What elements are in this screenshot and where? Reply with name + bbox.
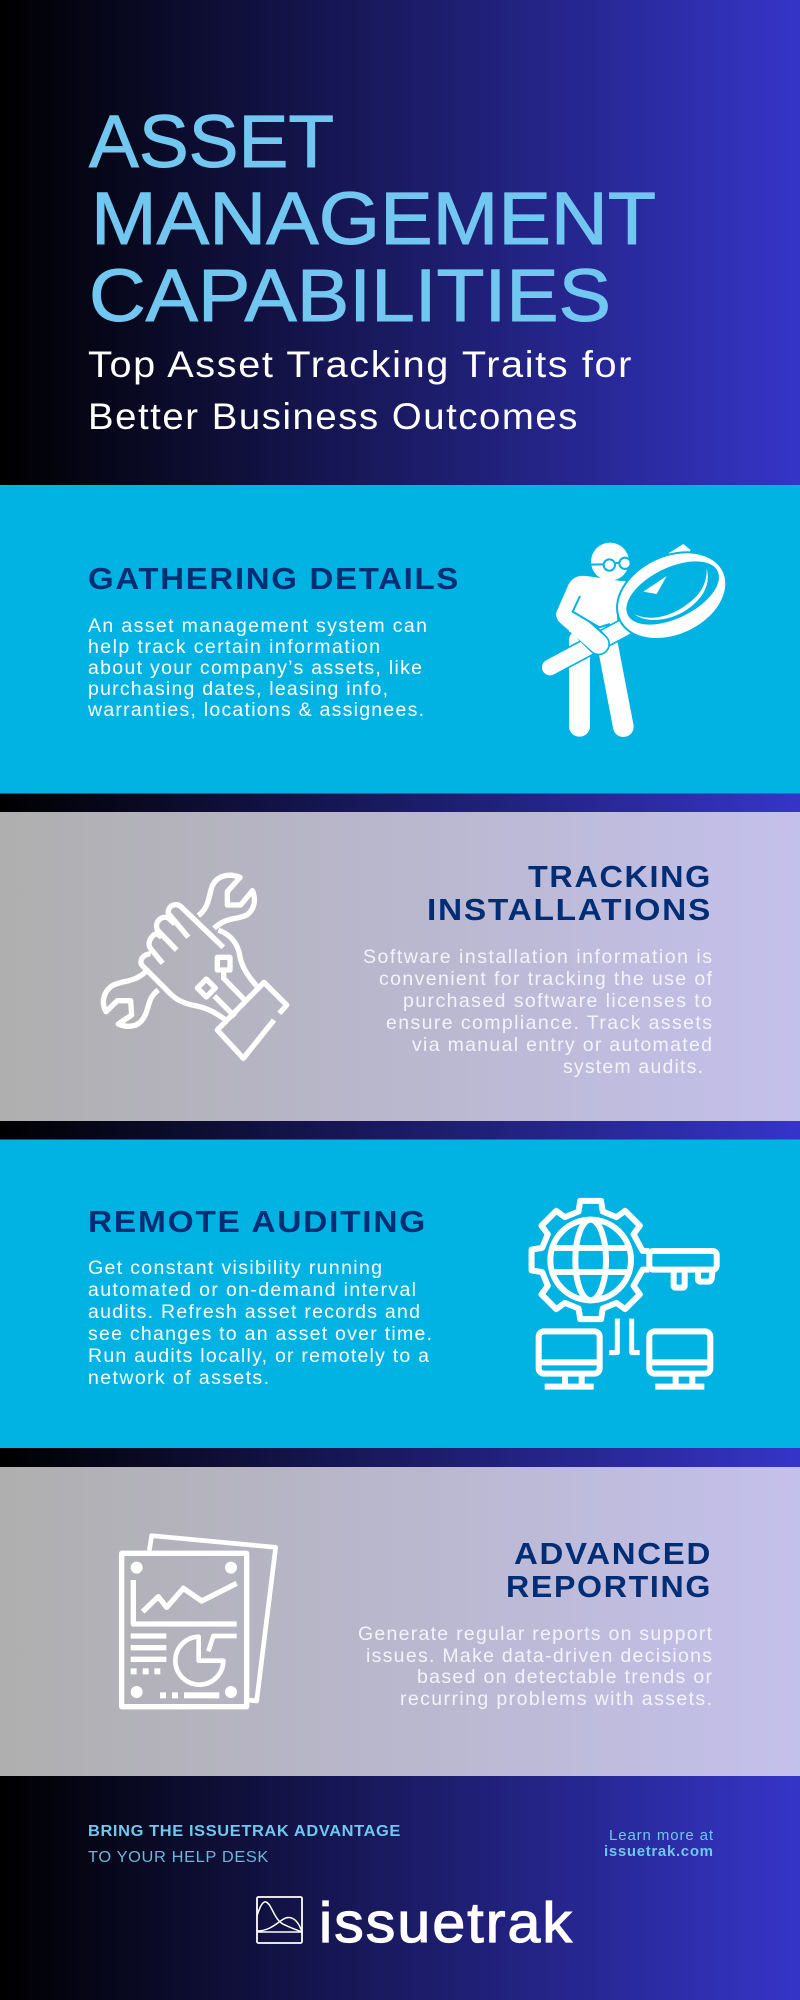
body text: advanced reporting	[358, 1623, 713, 1710]
icon: person with magnifying glass	[550, 535, 740, 737]
panel: tracking installations	[0, 812, 800, 1121]
body text: advanced reporting: recurring problems with assets.	[400, 1688, 712, 1710]
icon: report pages with charts	[122, 1536, 276, 1707]
subtitle	[88, 344, 633, 437]
body text: tracking installations: convenient for tracking the use of	[379, 968, 713, 990]
panel: gathering details	[0, 485, 800, 794]
learn more link: Learn more at	[609, 1827, 714, 1844]
body text: tracking installations: purchased software licenses to	[403, 990, 712, 1012]
body text: gathering details: purchasing dates, leasing info,	[88, 678, 388, 700]
body text: remote auditing: see changes to an asset over time.	[88, 1323, 432, 1345]
logo wordmark: issuetrak	[319, 1891, 574, 1955]
body text: gathering details: warranties, locations & assignees.	[87, 699, 424, 721]
heading: advanced reporting: ADVANCED	[514, 1536, 712, 1571]
body text: remote auditing: audits. Refresh asset records and	[88, 1301, 420, 1323]
body text: tracking installations: via manual entry or automated	[412, 1034, 712, 1056]
body text: tracking installations	[363, 946, 713, 1078]
body text: advanced reporting: issues. Make data-driven decisions	[366, 1645, 712, 1667]
title: ASSET	[89, 100, 334, 183]
heading: tracking installations: TRACKING	[528, 859, 712, 894]
footer	[88, 1823, 714, 1955]
body text: gathering details: help track certain information	[88, 636, 380, 658]
learn more link	[604, 1827, 714, 1860]
body text: gathering details: An asset management system can	[88, 615, 427, 637]
call to action	[88, 1823, 401, 1866]
subtitle: Top Asset Tracking Traits for	[88, 344, 633, 385]
call to action: TO YOUR HELP DESK	[88, 1849, 269, 1866]
learn more link: issuetrak.com	[604, 1843, 713, 1860]
icon: gear globe key and monitors	[532, 1201, 717, 1387]
icon: hand gripping wrench with circuit	[103, 875, 287, 1058]
body text: tracking installations: Software installation information is	[363, 946, 712, 968]
heading: tracking installations: INSTALLATIONS	[427, 892, 712, 927]
body text: tracking installations: system audits.	[563, 1056, 703, 1078]
heading: advanced reporting: REPORTING	[506, 1569, 712, 1604]
body text: advanced reporting: Generate regular reports on support	[358, 1623, 713, 1645]
logo mark	[257, 1897, 302, 1943]
heading: advanced reporting	[506, 1536, 712, 1604]
body text: remote auditing: network of assets.	[88, 1367, 269, 1389]
body text: gathering details	[87, 615, 427, 721]
body text: remote auditing: automated or on-demand interval	[88, 1279, 416, 1301]
body text: gathering details: about your company’s assets, like	[88, 657, 422, 679]
subtitle: Better Business Outcomes	[88, 396, 579, 437]
title: CAPABILITIES	[89, 254, 611, 337]
body text: remote auditing	[88, 1257, 432, 1389]
heading: tracking installations	[427, 859, 712, 927]
body text: remote auditing: Run audits locally, or remotely to a	[88, 1345, 429, 1367]
title: MANAGEMENT	[91, 177, 656, 260]
heading: remote auditing: REMOTE AUDITING	[88, 1204, 427, 1239]
panel: advanced reporting	[0, 1467, 800, 1776]
call to action: BRING THE ISSUETRAK ADVANTAGE	[88, 1823, 401, 1840]
body text: advanced reporting: based on detectable trends or	[417, 1666, 712, 1688]
header	[88, 100, 656, 437]
title	[89, 100, 656, 337]
logo: issuetrak	[257, 1891, 574, 1955]
heading: gathering details: GATHERING DETAILS	[88, 561, 460, 596]
body text: tracking installations: ensure compliance. Track assets	[386, 1012, 712, 1034]
panel: remote auditing	[0, 1140, 800, 1448]
body text: remote auditing: Get constant visibility running	[88, 1257, 382, 1279]
